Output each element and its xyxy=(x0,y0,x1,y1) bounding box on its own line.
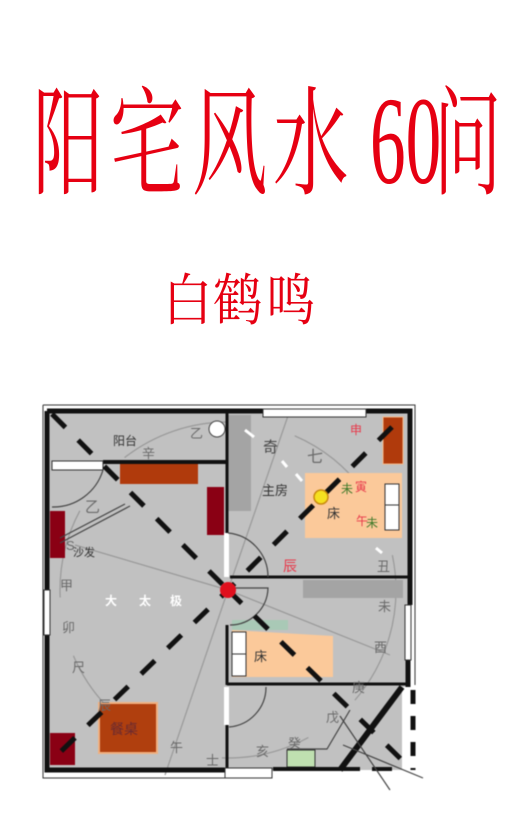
compass characters: 未 xyxy=(378,599,391,614)
feng shui axes xyxy=(50,414,410,768)
compass characters: 甲 xyxy=(60,578,73,593)
compass characters: 辰 xyxy=(98,698,111,713)
subtitle: author: 鹤 xyxy=(213,271,262,333)
main bedroom cabinet xyxy=(383,417,403,464)
compass characters xyxy=(60,426,391,768)
room labels: 沙发 xyxy=(73,545,95,559)
subtitle: author xyxy=(163,271,315,333)
centre point xyxy=(220,582,236,598)
compass characters: 卯 xyxy=(62,620,75,635)
door arcs xyxy=(52,470,423,790)
subtitle: author: 鸣 xyxy=(266,271,315,333)
green compass characters: 未 xyxy=(366,516,378,530)
compass characters: S xyxy=(66,538,75,553)
compass characters: 尺 xyxy=(72,660,85,675)
lamp xyxy=(209,421,225,437)
second bed xyxy=(232,620,333,677)
main bed xyxy=(305,473,402,538)
compass ring xyxy=(60,410,396,775)
taiji label: 极 xyxy=(170,593,182,608)
taiji label xyxy=(105,593,182,608)
room labels: 主房 xyxy=(262,483,288,498)
room labels: 餐桌 xyxy=(110,721,138,737)
green compass characters: 未 xyxy=(341,482,353,496)
title: 60 xyxy=(370,72,441,211)
room labels: 床 xyxy=(327,506,340,521)
floor plan xyxy=(43,405,423,790)
red compass characters xyxy=(283,423,368,574)
compass characters: 戊 xyxy=(326,710,339,725)
title: 问 xyxy=(434,79,501,211)
room labels: 床 xyxy=(254,649,267,664)
sofa xyxy=(50,511,65,558)
compass characters: 癸 xyxy=(288,736,301,751)
plan background xyxy=(47,411,410,770)
compass characters: 亥 xyxy=(256,744,269,759)
taiji label: 太 xyxy=(139,593,151,608)
compass characters: 乙 xyxy=(190,426,203,441)
compass characters: 酉 xyxy=(374,640,387,655)
corner cabinet xyxy=(50,733,75,765)
balcony furniture xyxy=(120,463,198,484)
compass characters: 乙 xyxy=(85,499,100,516)
title: 水 xyxy=(273,81,349,211)
windows xyxy=(44,409,411,778)
outer thin outline xyxy=(43,405,415,778)
dining table xyxy=(99,703,157,753)
red compass characters: 辰 xyxy=(283,558,297,574)
compass characters: 奇 xyxy=(263,439,278,456)
darker panels xyxy=(228,415,403,598)
red compass characters: 寅 xyxy=(355,479,367,494)
compass characters: 七 xyxy=(307,448,323,466)
green compass characters xyxy=(341,482,378,530)
red compass characters: 申 xyxy=(350,423,362,437)
title: 阳 xyxy=(33,81,104,212)
bed marker xyxy=(314,490,328,504)
compass characters: 辛 xyxy=(142,446,155,461)
subtitle: author: 白 xyxy=(163,271,212,333)
room labels xyxy=(73,433,340,737)
title: 风 xyxy=(192,81,268,211)
compass characters: 士 xyxy=(206,753,219,768)
room labels: 阳台 xyxy=(113,433,137,448)
title xyxy=(33,72,501,212)
compass characters: 庚 xyxy=(352,680,365,695)
compass characters: 午 xyxy=(170,740,183,755)
title: 宅 xyxy=(110,81,184,211)
compass characters: 丑 xyxy=(377,559,390,574)
green fixture xyxy=(287,750,315,767)
white compass marks xyxy=(245,430,382,553)
red compass characters: 午 xyxy=(356,514,368,528)
walls xyxy=(47,411,413,770)
taiji label: 大 xyxy=(105,593,117,608)
wardrobe xyxy=(207,487,224,535)
